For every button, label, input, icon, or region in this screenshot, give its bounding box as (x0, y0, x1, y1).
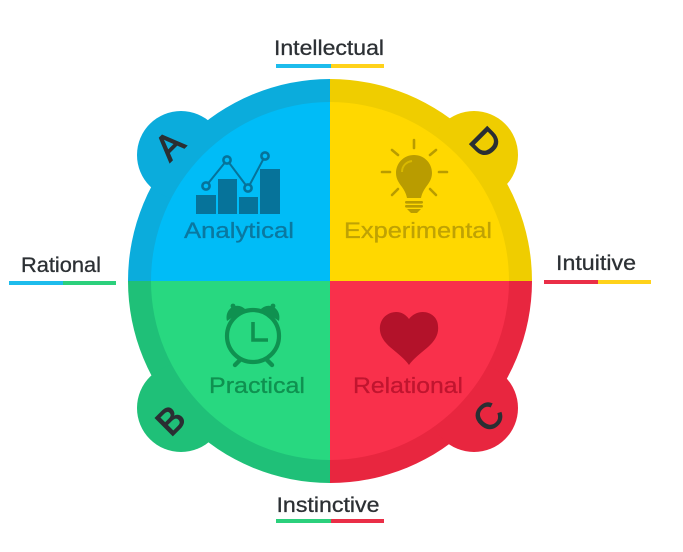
letter C: C (465, 393, 512, 440)
label: Intellectual: Intellectual (274, 37, 384, 60)
letter D: D (462, 119, 509, 166)
label: Practical: Practical (209, 373, 305, 398)
icon: heart (380, 312, 438, 365)
icon: light bulb (382, 140, 447, 213)
label: Intuitive: Intuitive (556, 252, 636, 275)
label: Rational: Rational (21, 254, 101, 277)
label: Intellectual (274, 37, 384, 68)
label: Relational: Relational (353, 373, 463, 398)
label: Experimental: Experimental (344, 218, 492, 243)
panel: Relational quadrant (330, 281, 532, 483)
label: Analytical: Analytical (184, 218, 294, 243)
letter B: B (147, 397, 193, 443)
label: Instinctive: Instinctive (276, 494, 380, 517)
panel: Practical quadrant (128, 281, 330, 483)
icon: bar chart with line (196, 152, 280, 214)
label: Rational (9, 254, 116, 285)
label: Intuitive (544, 252, 651, 284)
panel: Experimental quadrant (330, 79, 532, 281)
panel: Analytical quadrant (128, 79, 330, 281)
label: Instinctive (276, 494, 384, 523)
letter A: A (146, 122, 192, 168)
icon: alarm clock (227, 304, 279, 365)
